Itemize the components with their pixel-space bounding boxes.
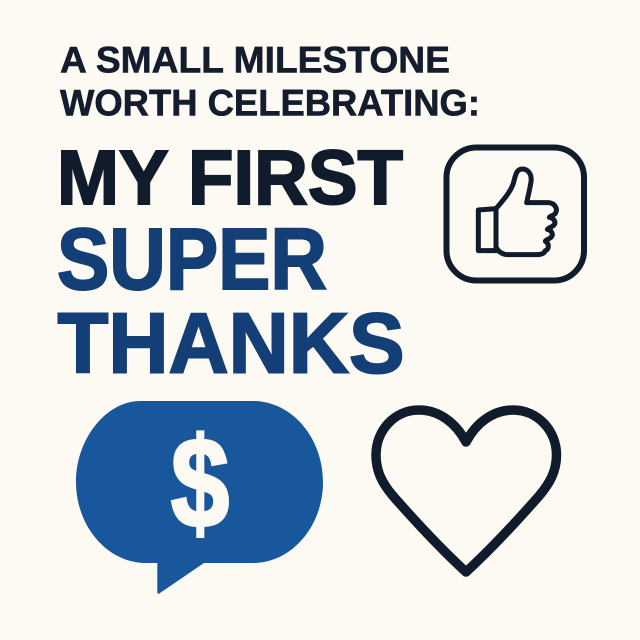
icon: thumbs up in rounded square — [446, 148, 584, 280]
icon: speech bubble with dollar sign: $ — [171, 411, 229, 554]
heading: small milestone — [60, 40, 480, 124]
title: super thanks: THANKS — [58, 296, 404, 392]
heading: small milestone: WORTH CELEBRATING: — [60, 83, 480, 124]
title: super thanks — [57, 211, 404, 392]
title: super thanks: SUPER — [57, 211, 327, 308]
title: my first: MY FIRST — [57, 135, 403, 221]
heading: small milestone: A SMALL MILESTONE — [60, 40, 450, 81]
icon: speech bubble with dollar sign — [76, 401, 323, 594]
icon: outlined heart — [376, 410, 556, 572]
